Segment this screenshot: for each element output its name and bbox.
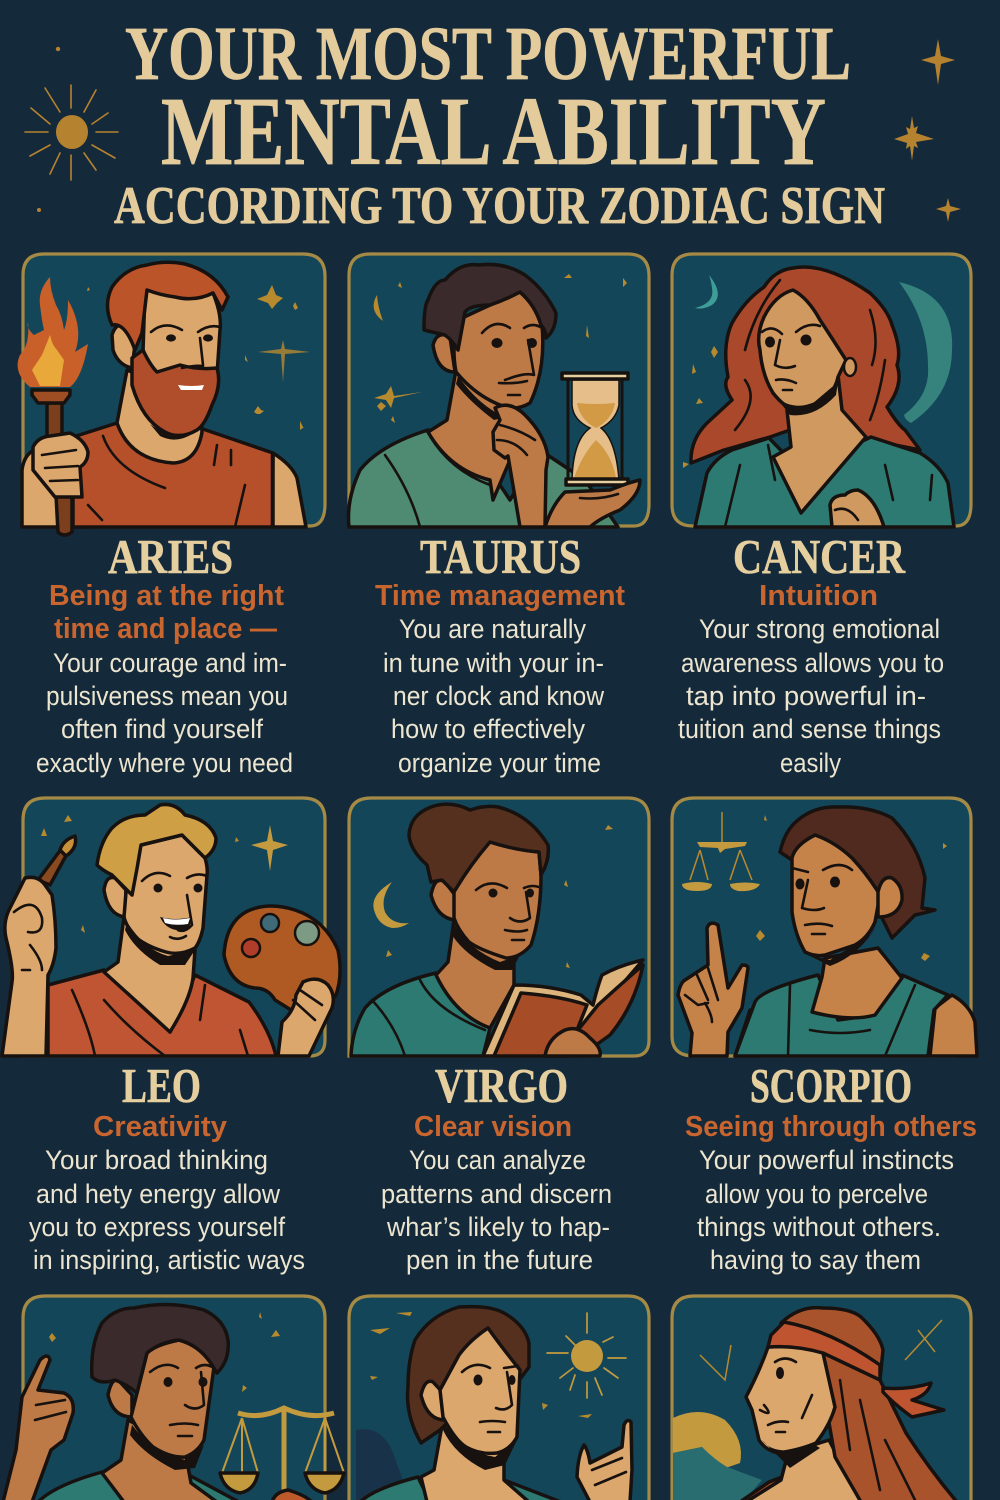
title <box>114 12 885 235</box>
label: cancer text: tuition and sense things <box>678 714 941 744</box>
icon: specks lower left <box>49 1312 280 1392</box>
icon: specks virgo <box>386 825 613 968</box>
panel: lower right <box>672 1296 971 1500</box>
label: cancer text: awareness allows you to <box>681 648 944 678</box>
label: scorpio text: allow you to percelve <box>705 1179 928 1209</box>
label: aries text <box>36 529 293 778</box>
icon: sun lower panel <box>547 1313 626 1398</box>
icon: hourglass <box>562 373 628 485</box>
figure: scorpio person <box>678 807 977 1056</box>
label: taurus text: how to effectively <box>391 714 585 744</box>
icon: palette <box>224 906 340 1056</box>
label: taurus text: in tune with your in- <box>383 648 604 678</box>
label: virgo text: pen in the future <box>406 1245 593 1275</box>
icon: brush <box>38 848 68 885</box>
icon: torch <box>18 277 88 535</box>
icon: constellation lines <box>700 1320 942 1380</box>
label: cancer text: easily <box>780 748 841 778</box>
icon: moon and stars taurus <box>374 274 627 423</box>
label: leo text: in inspiring, artistic ways <box>33 1245 305 1275</box>
label: cancer text: Intuition <box>759 580 878 612</box>
label: scorpio text <box>685 1058 977 1275</box>
icon: star leo <box>251 825 288 871</box>
icon: specks lower middle <box>370 1312 592 1418</box>
panel: leo <box>2 798 340 1056</box>
label: scorpio text: having to say them <box>710 1245 921 1275</box>
label: taurus text: organize your time <box>398 748 601 778</box>
label: cancer text <box>678 529 944 778</box>
label: taurus text: ner clock and know <box>393 681 604 711</box>
label: virgo text: Clear vision <box>414 1111 572 1143</box>
label: taurus text: Time management <box>375 580 625 612</box>
icon: specks scorpio <box>756 815 947 961</box>
icon: moons cancer <box>695 275 952 423</box>
label: aries text: Your courage and im- <box>53 648 287 678</box>
label: virgo text <box>381 1058 612 1275</box>
figure: lower middle woman <box>360 1307 632 1500</box>
label: leo text: LEO <box>122 1058 201 1113</box>
label: scorpio text: SCORPIO <box>750 1058 912 1113</box>
figure: taurus person <box>348 264 640 527</box>
label: aries text: Being at the right <box>49 580 284 612</box>
label: aries text: pulsiveness mean you <box>46 681 288 711</box>
figure: aries man <box>18 262 306 535</box>
label: leo text: Your broad thinking <box>45 1145 268 1175</box>
label: virgo text: You can analyze <box>409 1145 586 1175</box>
label: virgo text: whar’s likely to hap- <box>386 1212 610 1242</box>
label: aries text: ARIES <box>108 529 233 584</box>
label: taurus text: TAURUS <box>420 529 581 584</box>
figure: virgo woman <box>351 804 643 1056</box>
panel: aries <box>18 254 325 535</box>
label: leo text <box>29 1058 305 1275</box>
panel: virgo <box>349 798 649 1056</box>
icon: book <box>483 960 643 1056</box>
label: cancer text: tap into powerful in- <box>686 681 926 711</box>
label: taurus text <box>375 529 625 778</box>
icon: scales scorpio <box>682 812 760 891</box>
panel: scorpio <box>672 798 977 1056</box>
label: scorpio text: things without others. <box>697 1212 941 1242</box>
icon: pointing hand <box>678 923 748 1056</box>
label: aries text: time and place — <box>54 613 277 645</box>
label: scorpio text: Your powerful instincts <box>699 1145 954 1175</box>
icon: specks leo <box>41 815 239 933</box>
label: virgo text: VIRGO <box>435 1058 568 1113</box>
panel: taurus <box>348 254 649 527</box>
panel: cancer <box>672 254 971 527</box>
figure: leo man <box>2 804 340 1056</box>
icon: dark hill <box>356 1429 410 1500</box>
icon: stars top right <box>37 39 961 222</box>
figure: profile with headband <box>740 1308 957 1500</box>
label: aries text: often find yourself <box>61 714 263 744</box>
figure: cancer woman <box>691 267 954 527</box>
icon: crescent virgo <box>373 882 409 928</box>
label: virgo text: patterns and discern <box>381 1179 612 1209</box>
label: leo text: you to express yourself <box>29 1212 285 1242</box>
icon: pointing hand <box>577 1421 632 1500</box>
label: cancer text: Your strong emotional <box>699 614 940 644</box>
icon: scales libra <box>220 1408 344 1500</box>
icon: sun and hill <box>673 1412 762 1500</box>
label: cancer text: CANCER <box>733 529 905 584</box>
icon: raised hand <box>3 1356 73 1500</box>
figure: lower left man <box>3 1304 344 1500</box>
label: scorpio text: Seeing through others <box>685 1111 977 1143</box>
label: leo text: Creativity <box>93 1111 227 1143</box>
icon: stars cancer <box>683 346 948 483</box>
panel: lower middle <box>349 1296 649 1500</box>
label: aries text: exactly where you need <box>36 748 293 778</box>
label: taurus text: You are naturally <box>399 614 586 644</box>
title: MENTAL ABILITY <box>161 78 826 186</box>
icon: sun top left <box>25 85 118 180</box>
panel: lower left <box>3 1296 344 1500</box>
label: leo text: and hety energy allow <box>36 1179 280 1209</box>
icon: stars aries <box>87 285 310 430</box>
